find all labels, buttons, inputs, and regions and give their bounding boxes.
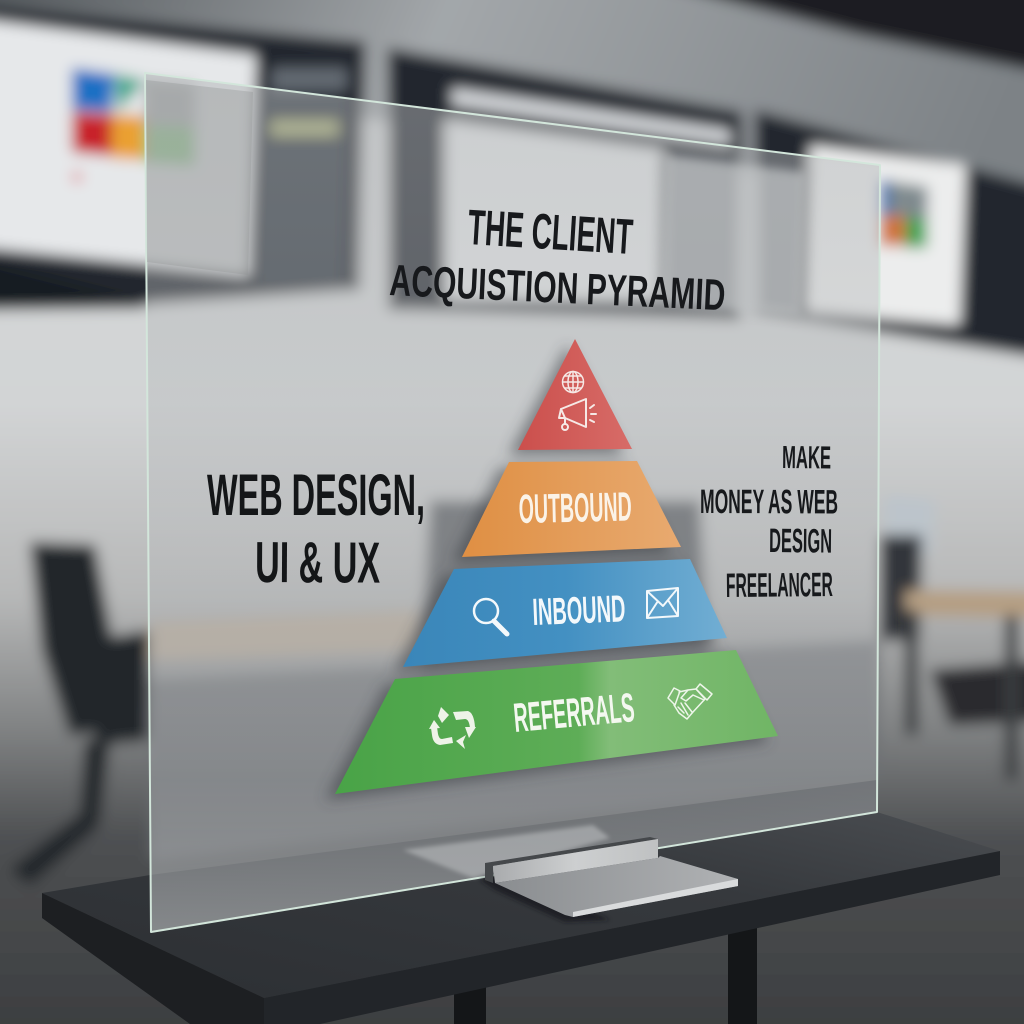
desk through glass (150, 610, 420, 660)
left chair (10, 542, 150, 885)
pyramid tier: referrals (335, 650, 778, 794)
pyramid tier: outbound: OUTBOUND (518, 483, 632, 532)
right text: make money: MAKE (782, 439, 831, 475)
dark ceiling corner (610, 0, 1024, 75)
left monitor (0, 5, 365, 305)
table top (42, 780, 1000, 998)
icon: recycle arrows (429, 707, 476, 749)
stand clamp slot (485, 837, 658, 883)
icon: envelope (647, 588, 678, 618)
pyramid tier: outbound (462, 461, 681, 557)
title: THE CLIENT (466, 199, 634, 265)
icon: magnifier (474, 599, 507, 634)
right text: make money: MONEY AS WEB (700, 483, 838, 521)
lower floor haze (150, 640, 880, 860)
right chair and desk (880, 495, 1024, 780)
right text: make money: DESIGN (769, 522, 832, 561)
icon: globe (562, 372, 584, 392)
left text: web design, ui and ux: WEB DESIGN, (207, 463, 425, 528)
left text: web design, ui and ux: UI & UX (255, 530, 380, 596)
stand clamp (493, 839, 658, 883)
title: ACQUISTION PYRAMID (389, 256, 726, 320)
glass sign scene: FREELANCER (726, 566, 833, 605)
icon: megaphone (559, 399, 596, 430)
pyramid tier: red top (518, 339, 632, 450)
upper wall (0, 0, 1024, 220)
dark band under monitors (0, 258, 145, 310)
right text: make money (700, 439, 838, 605)
glass tint over left screen (146, 80, 253, 275)
table front edges (42, 893, 264, 1024)
stand base reflected behind glass (403, 825, 610, 878)
table (42, 780, 1000, 1024)
glass panel (145, 73, 880, 932)
middle monitor (388, 48, 742, 320)
right monitor (755, 110, 1024, 360)
pyramid tier: referrals: REFERRALS (512, 684, 636, 741)
dark patch behind pyramid (420, 500, 710, 680)
pyramid shadows (325, 345, 768, 800)
stand shadow (480, 872, 610, 922)
pyramid tier: inbound (403, 559, 727, 667)
label: inbound: INBOUND (532, 588, 626, 634)
pyramid (335, 339, 778, 794)
left text: web design, ui and ux (207, 463, 425, 596)
metal stand (480, 837, 738, 922)
table legs (454, 920, 757, 1024)
stand base plate (495, 856, 738, 917)
title (389, 199, 726, 320)
icon: handshake (668, 684, 712, 719)
glass reflection strip by the right screen (660, 155, 806, 318)
